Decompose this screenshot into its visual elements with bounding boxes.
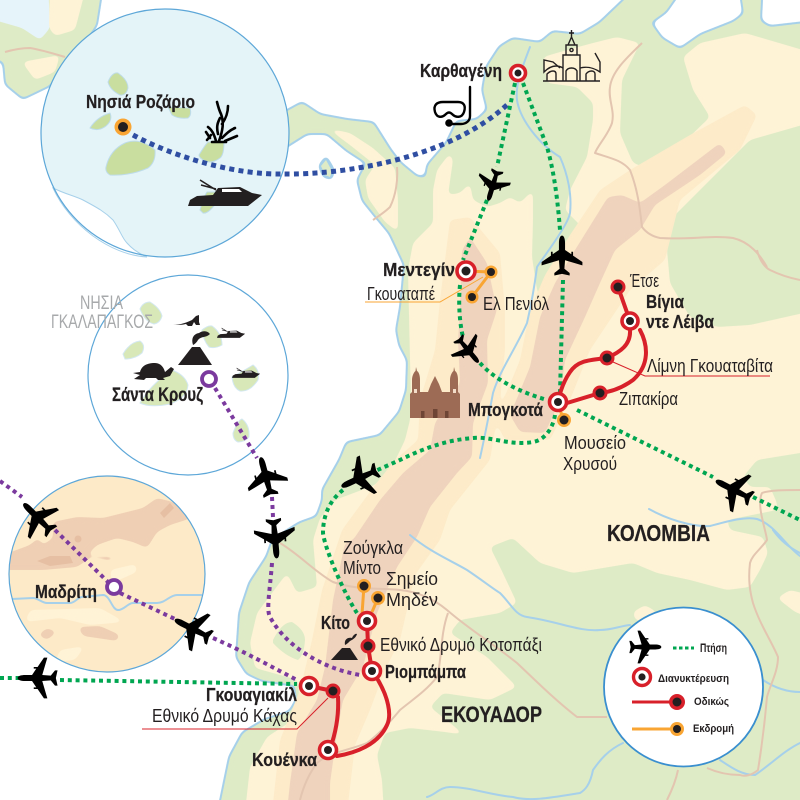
icon: boat right: [232, 368, 260, 378]
place labels: Μεντεγίν: [383, 260, 455, 280]
islands: [90, 73, 224, 213]
icon: coral: [206, 102, 237, 142]
secondary labels: Μίντο: [343, 558, 381, 578]
lagoons north-east: [653, 0, 800, 47]
legend: overnight: Διανυκτέρευση: [658, 673, 729, 685]
secondary labels: Λίμνη Γκουαταβίτα: [647, 356, 773, 376]
place labels: Σάντα Κρουζ: [112, 385, 203, 406]
north-west corner detail: [0, 0, 50, 40]
legend: excursion: Εκδρομή: [693, 723, 734, 735]
stops: road points: [326, 280, 626, 698]
secondary labels: Σημείο: [386, 569, 438, 589]
excursion lines: [362, 271, 564, 614]
secondary labels: Ζιπακίρα: [619, 389, 678, 409]
place labels: Καρθαγένη: [420, 61, 502, 81]
inset circle: Rosario Islands: [41, 9, 289, 257]
small island near coast: [321, 160, 332, 177]
secondary labels: Ζούγκλα: [343, 538, 403, 558]
legend: overnight: [634, 668, 729, 686]
stops: overnight markers: [300, 66, 638, 758]
place labels: [35, 61, 714, 770]
route: blue boat line: [133, 102, 510, 174]
secondary labels: Ελ Πενιόλ: [483, 294, 549, 314]
place labels: Γκουαγιακίλ: [206, 685, 297, 705]
place labels: ΚΟΛΟΜΒΙΑ: [607, 520, 710, 546]
icon: iguana: [173, 315, 200, 326]
secondary labels: Έτσε: [629, 271, 659, 291]
secondary labels: ΓΚΑΛΑΠΑΓΚΟΣ: [51, 312, 153, 333]
callout lines: [142, 277, 770, 729]
inset circle: Madrid: [0, 476, 205, 672]
secondary labels: Μουσείο: [564, 433, 626, 453]
place labels: Βίγια: [646, 292, 684, 312]
stops: centres: [118, 70, 634, 754]
place labels: Κίτο: [321, 613, 350, 633]
route: purple flights: [0, 388, 360, 680]
icon: boat left: [217, 328, 245, 338]
place labels: Νησιά Ροζάριο: [86, 91, 195, 113]
legend: flight: Πτήση: [700, 643, 727, 655]
icon: snorkel mask: [434, 87, 470, 126]
cream lowlands: [243, 33, 800, 800]
legend: [604, 608, 763, 766]
icon: Bogotá cathedral: [410, 367, 460, 418]
secondary labels: Μηδέν: [386, 590, 438, 610]
legend: flight: [629, 631, 727, 663]
airplanes: [9, 165, 761, 698]
road routes: [309, 287, 646, 756]
stops: excursion points: [114, 118, 571, 605]
inset circle: Galápagos: [88, 275, 288, 475]
secondary labels: Εθνικό Δρυμό Κοτοπάξι: [380, 635, 542, 655]
brown ridges: [285, 143, 727, 800]
icon: turtle: [133, 363, 174, 380]
green blob inside southern lowlands: [273, 622, 305, 660]
route: green flights: [0, 83, 800, 684]
place labels: Κουένκα: [252, 750, 317, 770]
place labels: Μαδρίτη: [35, 581, 97, 602]
icon: volcano Cotopaxi: [331, 634, 358, 660]
icon: Cartagena church: [543, 30, 600, 81]
place labels: Ριομπάμπα: [385, 662, 466, 682]
place labels: ντε Λέιβα: [646, 312, 714, 332]
legend: road: [632, 694, 729, 710]
icon: boat: [188, 180, 262, 206]
secondary labels: Εθνικό Δρυμό Κάχας: [152, 706, 297, 726]
stops: purple rings: [107, 372, 216, 594]
icon: volcano Galápagos: [178, 331, 212, 365]
place labels: ΕΚΟΥΑΔΟΡ: [441, 702, 542, 727]
legend: excursion: [632, 722, 734, 736]
rivers: [410, 47, 800, 799]
secondary labels: [51, 271, 773, 726]
secondary labels: ΝΗΣΙΑ: [80, 293, 123, 314]
legend: road: Οδικώς: [694, 696, 729, 708]
islands: [123, 302, 258, 442]
north-west corner cream: [22, 0, 88, 80]
secondary labels: Γκουαταπέ: [367, 284, 435, 304]
place labels: Μπογκοτά: [468, 400, 543, 420]
tan foothills: [270, 105, 757, 800]
secondary labels: Χρυσού: [563, 454, 617, 474]
